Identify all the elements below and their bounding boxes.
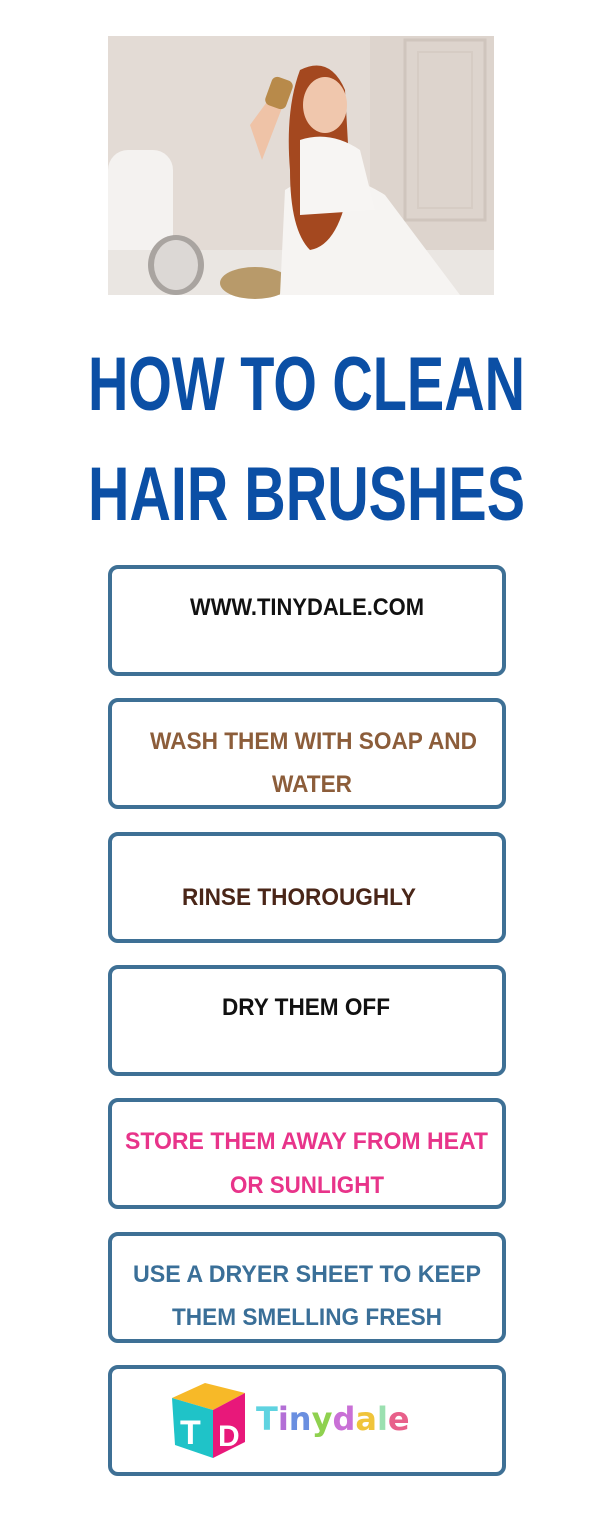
icon: TD cube: [172, 1383, 245, 1458]
box: website: [110, 567, 504, 674]
box: step wash: [110, 700, 504, 807]
box: step dry: [110, 967, 504, 1074]
box: step rinse: [110, 834, 504, 941]
photo: woman brushing hair: [108, 36, 494, 299]
box: step store: [110, 1100, 504, 1207]
box: step wash: WATER: [272, 771, 352, 798]
box: logo: [110, 1367, 504, 1474]
logo wordmark: Tinydale: [256, 1400, 410, 1438]
box: step dry: DRY THEM OFF: [222, 994, 390, 1021]
icon: TD cube: T: [180, 1414, 201, 1452]
box: step dryer sheet: THEM SMELLING FRESH: [172, 1304, 442, 1331]
icon: TD cube: D: [218, 1420, 240, 1453]
box: website: WWW.TINYDALE.COM: [190, 594, 424, 621]
box: step dryer sheet: USE A DRYER SHEET TO KEEP: [133, 1261, 481, 1288]
box: step rinse: RINSE THOROUGHLY: [182, 884, 416, 911]
box: step store: OR SUNLIGHT: [230, 1172, 384, 1199]
box: step store: STORE THEM AWAY FROM HEAT: [125, 1128, 488, 1155]
title: [88, 342, 525, 537]
box: step dryer sheet: [110, 1234, 504, 1341]
box: step wash: WASH THEM WITH SOAP AND: [150, 728, 477, 755]
